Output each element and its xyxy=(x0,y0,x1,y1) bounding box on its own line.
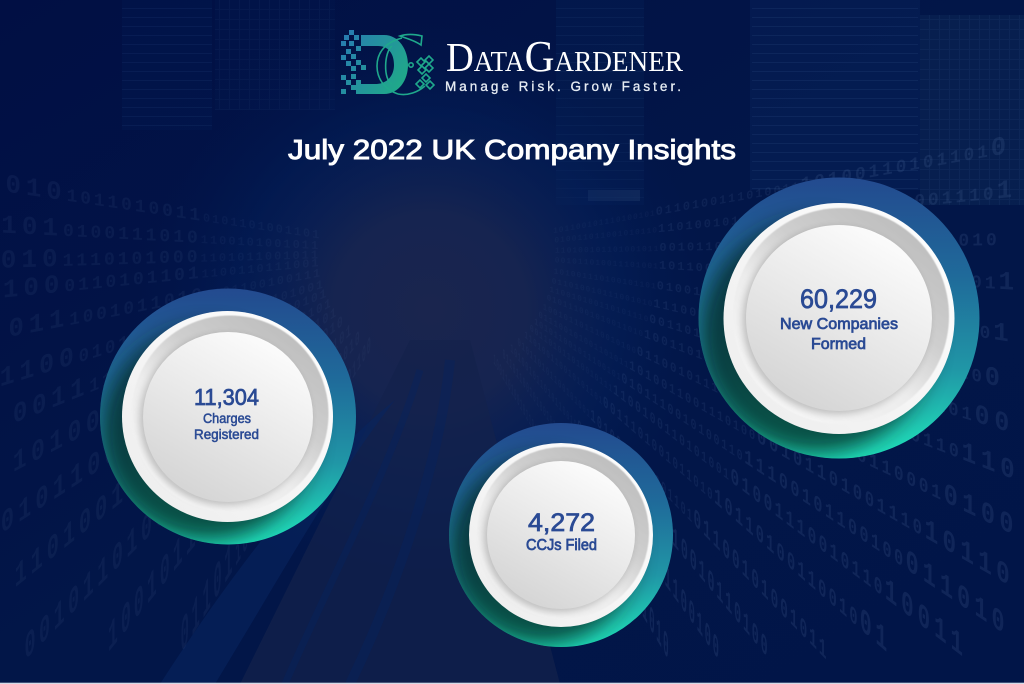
value and label: Registered xyxy=(194,426,259,442)
binary wall: right: 0010110100111010011011001101001100100111001010011 xyxy=(555,240,1019,298)
value and label xyxy=(194,384,259,442)
binary wall: left: 10101001110101100101001011 xyxy=(1,211,320,257)
icon: DC monogram xyxy=(341,30,434,95)
binary wall: right: 101011001011100101010111001010011011100101100100011010 xyxy=(534,298,1009,646)
binary wall: left: 10001101011011100110111001 xyxy=(3,244,321,306)
value and label: 11,304 xyxy=(194,384,259,410)
binary wall: right: 010110101100101001101001011100110101100101001011 xyxy=(517,323,829,670)
binary wall: right: 010111001010011010100110100101110001011100100110110 xyxy=(547,278,1019,491)
title: July 2022 UK Company Insights xyxy=(288,134,736,165)
binary wall: right: 11010011001010110100111010010110101011010011001001 xyxy=(524,310,891,667)
value and label: Charges xyxy=(203,410,251,426)
binary wall: left: 001111001001100110101100101 xyxy=(13,273,328,433)
binary wall: right: 00110101101001011111001001101010010100111001011010011 xyxy=(530,303,967,670)
binary wall: right: 0100110110010101101101001011100101011010110011101 xyxy=(554,174,1017,251)
binary wall: left: 010110010100101110110100101101 xyxy=(1,289,338,543)
binary wall: right: 0110110010100101101001011010011001011100100 xyxy=(503,331,721,672)
stat circle: CCJs filed xyxy=(449,423,673,647)
wordmark: DATAGARDENER xyxy=(446,32,684,81)
binary wall: left: 100101101001011011101001010010 xyxy=(108,307,361,666)
binary wall: right: 11001010011010111000110101101001011011001001110100 xyxy=(550,269,1014,442)
binary wall: right xyxy=(493,130,1019,674)
binary wall: right: 110100101101001011001011010011011111001010011010 xyxy=(555,231,1000,259)
stat circle: charges registered xyxy=(100,288,356,544)
binary wall: right: 101001011010110010011010100101110010010110100 xyxy=(510,328,770,669)
binary wall: left: 01010110100110101101001101 xyxy=(5,169,321,247)
value and label: Formed xyxy=(811,336,866,353)
binary wall: right: 10011010010110100101011010011001011001010 xyxy=(493,335,670,674)
value and label: 4,272 xyxy=(528,509,595,537)
binary wall: right: 1001011011100101000110010111001011110100101100010100 xyxy=(543,286,1018,546)
road xyxy=(160,340,560,684)
logo: DataGardener xyxy=(341,30,684,95)
value and label: CCJs Filed xyxy=(526,537,597,554)
binary wall: left: 0110110010110010010110101100 xyxy=(181,307,372,669)
value and label: 60,229 xyxy=(800,284,877,314)
tagline: Manage Risk. Grow Faster. xyxy=(445,79,681,94)
stat circle: new companies xyxy=(698,178,980,458)
value and label xyxy=(526,509,597,554)
binary wall: right: 1010011101001011010100111010110010011010011100101 xyxy=(554,251,1014,350)
binary wall: right: 01110010100110101110100110011101000010110100111010110 xyxy=(539,293,1014,598)
binary wall: left: 1010000110101101001011100101 xyxy=(13,283,332,482)
binary wall: left: 01110010110100101100100111 xyxy=(9,254,322,345)
binary wall: left: 1101001001011010011001101001010 xyxy=(15,296,344,598)
binary wall: right: 1011001011101001010110100111010011101001101011010 xyxy=(553,130,1011,241)
value and label xyxy=(780,284,898,353)
binary wall: left: 110001011010011010011101001 xyxy=(0,265,325,395)
binary wall: left: 01011101010001101011001011 xyxy=(1,236,320,276)
binary wall: left: 001011010010100101100101101001101 xyxy=(24,302,352,672)
binary wall: left xyxy=(0,169,372,672)
value and label: New Companies xyxy=(780,316,898,333)
binary wall: right: 0110100101110010101110010100111010110001110010100 xyxy=(552,261,1005,396)
skyline buildings xyxy=(122,0,1024,205)
